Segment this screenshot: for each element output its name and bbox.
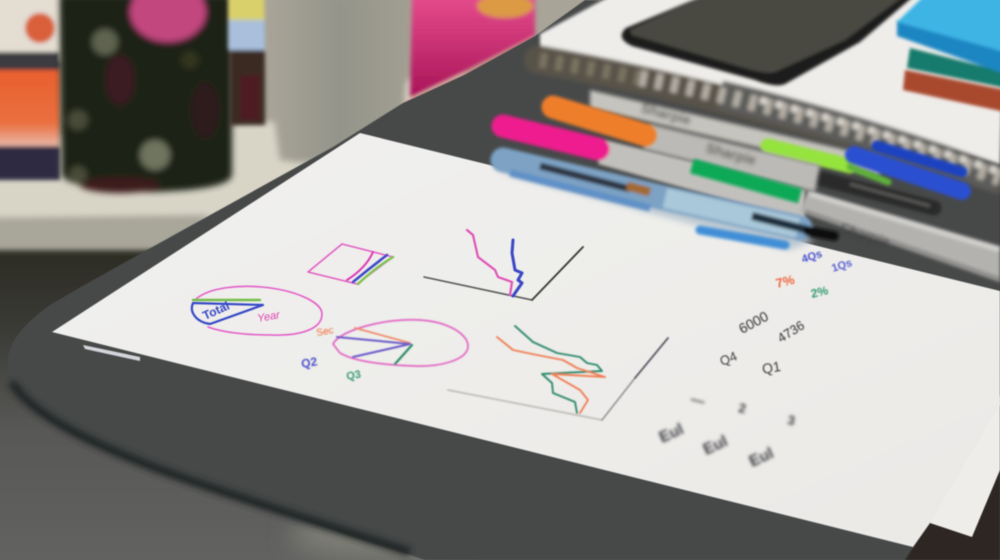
handwritten table of numbers: 7% — [774, 272, 796, 291]
handwritten footer rows: Eul — [701, 433, 730, 459]
back sheet of paper, right edge — [925, 395, 1000, 537]
background wall top-left — [0, 0, 600, 160]
notebook page — [540, 0, 1000, 165]
pie chart one: Total — [201, 299, 232, 323]
line chart bottom — [448, 326, 668, 420]
handwritten table of numbers: 4736 — [775, 317, 807, 346]
background: floral plant pot — [60, 0, 232, 193]
orange cap — [553, 107, 645, 135]
shelf underside shade — [0, 215, 210, 250]
pen: grey marker far back — [590, 90, 880, 176]
pie chart two: Q2 — [300, 354, 319, 371]
spiral binding — [538, 60, 1000, 180]
sticky note stack — [897, 0, 1000, 112]
background: white cup — [267, 0, 412, 162]
pen: green band sharpie — [692, 166, 1000, 282]
pie chart one: Year — [256, 309, 282, 325]
wood floor patch bottom right — [905, 465, 1000, 560]
pie chart two — [300, 320, 468, 383]
pen: lime marker — [768, 146, 888, 182]
front sheet of paper — [52, 133, 1000, 547]
background: bottle behind pot — [228, 0, 265, 125]
pen: dark blue cap rear — [877, 146, 962, 172]
handwritten footer rows: 2 — [737, 400, 747, 416]
pen: orange marker body: Sharpie — [704, 139, 758, 168]
line chart top — [424, 230, 583, 300]
background: pink object — [405, 0, 535, 108]
hand-drawn charts — [192, 230, 668, 420]
handwritten table of numbers — [718, 248, 854, 377]
pen: pink capped marker — [503, 126, 805, 222]
pie chart two: Q3 — [345, 369, 362, 383]
handwritten footer rows: 3 — [786, 412, 796, 428]
table edge shadow — [12, 382, 410, 552]
handwritten footer rows: Eul — [747, 445, 776, 471]
handwritten table of numbers: 4Qs — [800, 248, 824, 266]
back sheet of paper, left sliver — [83, 345, 140, 361]
pen shadow on paper — [495, 172, 815, 250]
background: orange object — [0, 0, 62, 180]
handwritten table of numbers: 2% — [809, 283, 830, 301]
handwritten footer rows: — — [689, 390, 707, 409]
handwritten footer rows: Eul — [657, 421, 686, 447]
pie chart two: Sec — [316, 325, 334, 339]
pie chart one — [192, 286, 322, 335]
handwritten table of numbers: 1Qs — [830, 257, 854, 275]
pen: blue cap front — [854, 155, 962, 191]
pen: orange marker body — [643, 124, 820, 192]
background: shelf surface — [0, 60, 470, 245]
stacked rectangle sketch — [308, 244, 393, 284]
pen: grey marker far back: Sharpie — [639, 99, 693, 128]
handwritten table of numbers: Q1 — [761, 358, 782, 377]
smartphone — [622, 0, 915, 85]
handwritten table of numbers: 6000 — [736, 308, 771, 337]
handwritten footer rows — [657, 390, 796, 471]
pen: black cap — [822, 179, 934, 208]
pen: translucent blue ballpoint — [503, 160, 834, 245]
pen: green band sharpie: Sharpie — [837, 220, 891, 251]
handwritten table of numbers: Q4 — [718, 348, 739, 369]
